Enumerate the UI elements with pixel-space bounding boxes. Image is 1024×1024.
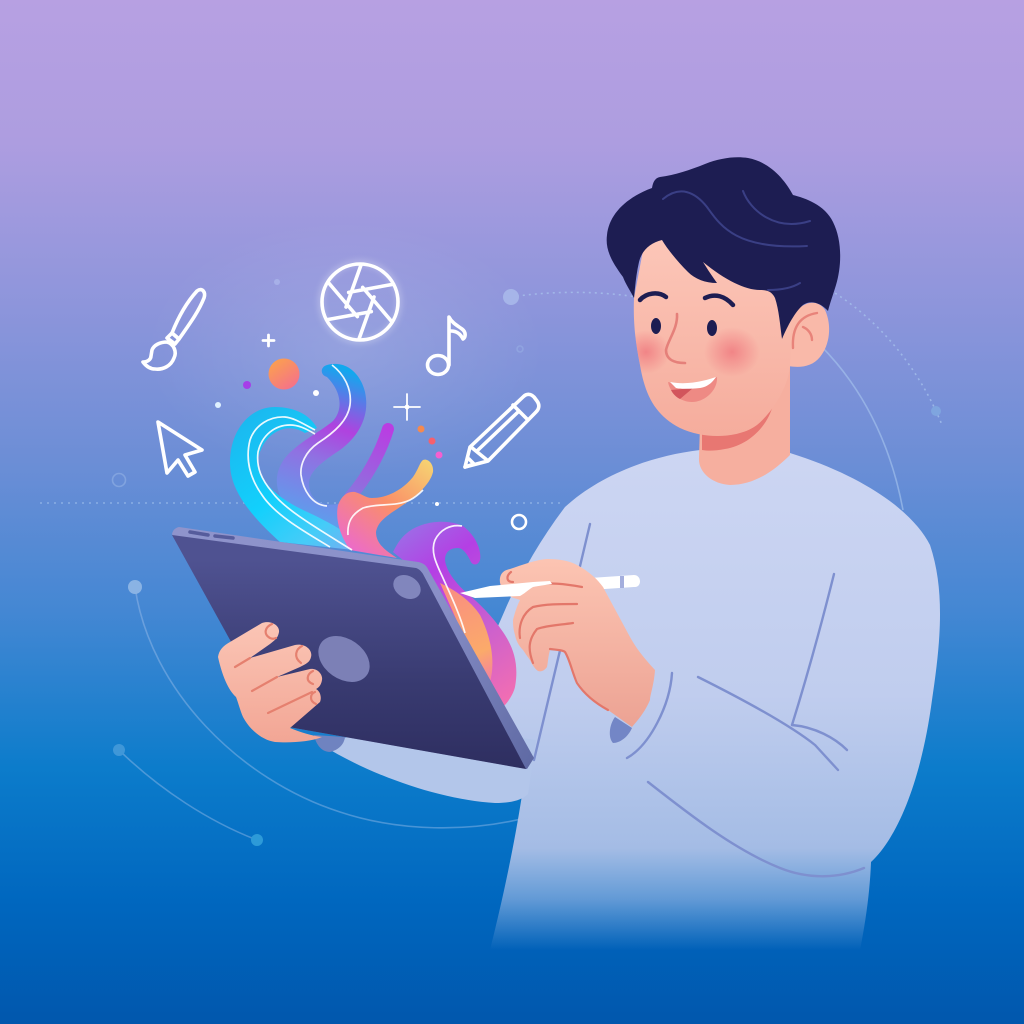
tablet — [172, 527, 534, 769]
person: torso sweater — [470, 450, 940, 950]
magenta wave — [393, 522, 516, 707]
neck shadow — [702, 405, 773, 451]
cyan wave — [230, 407, 372, 552]
icon halo — [145, 220, 545, 480]
cuff shadow — [610, 717, 632, 743]
icon: pencil — [465, 394, 539, 467]
arm under tablet — [322, 720, 536, 803]
orange inner flame — [440, 583, 492, 682]
left hand — [218, 622, 322, 742]
icon: cursor arrow — [158, 422, 202, 476]
right hand — [500, 559, 655, 727]
floating icons — [143, 263, 539, 529]
icon: music note — [428, 317, 465, 374]
tablet camera — [389, 570, 425, 604]
hair — [607, 157, 840, 339]
mouth — [668, 377, 717, 402]
stylus front — [460, 581, 552, 598]
eyes — [651, 318, 717, 336]
ear — [788, 303, 829, 367]
eyebrows — [640, 293, 733, 305]
tablet logo — [310, 627, 378, 691]
violet stroke — [350, 429, 388, 497]
nose — [666, 314, 685, 363]
orange wave — [337, 460, 433, 558]
stylus back — [590, 575, 640, 590]
sparkle large — [394, 394, 420, 420]
sparkle small — [263, 335, 274, 346]
icon: paintbrush — [143, 290, 205, 369]
neck — [699, 360, 790, 485]
sleeve shadow — [314, 735, 345, 752]
decorative network lines — [40, 279, 942, 846]
purple wave — [277, 364, 366, 540]
blush — [636, 331, 756, 373]
ring — [512, 515, 526, 529]
creative swirl art — [230, 364, 516, 707]
confetti dots — [215, 358, 442, 458]
face — [634, 220, 792, 436]
icon glow — [321, 263, 399, 341]
sweater fold lines — [534, 524, 864, 876]
icon: camera aperture — [321, 264, 399, 340]
